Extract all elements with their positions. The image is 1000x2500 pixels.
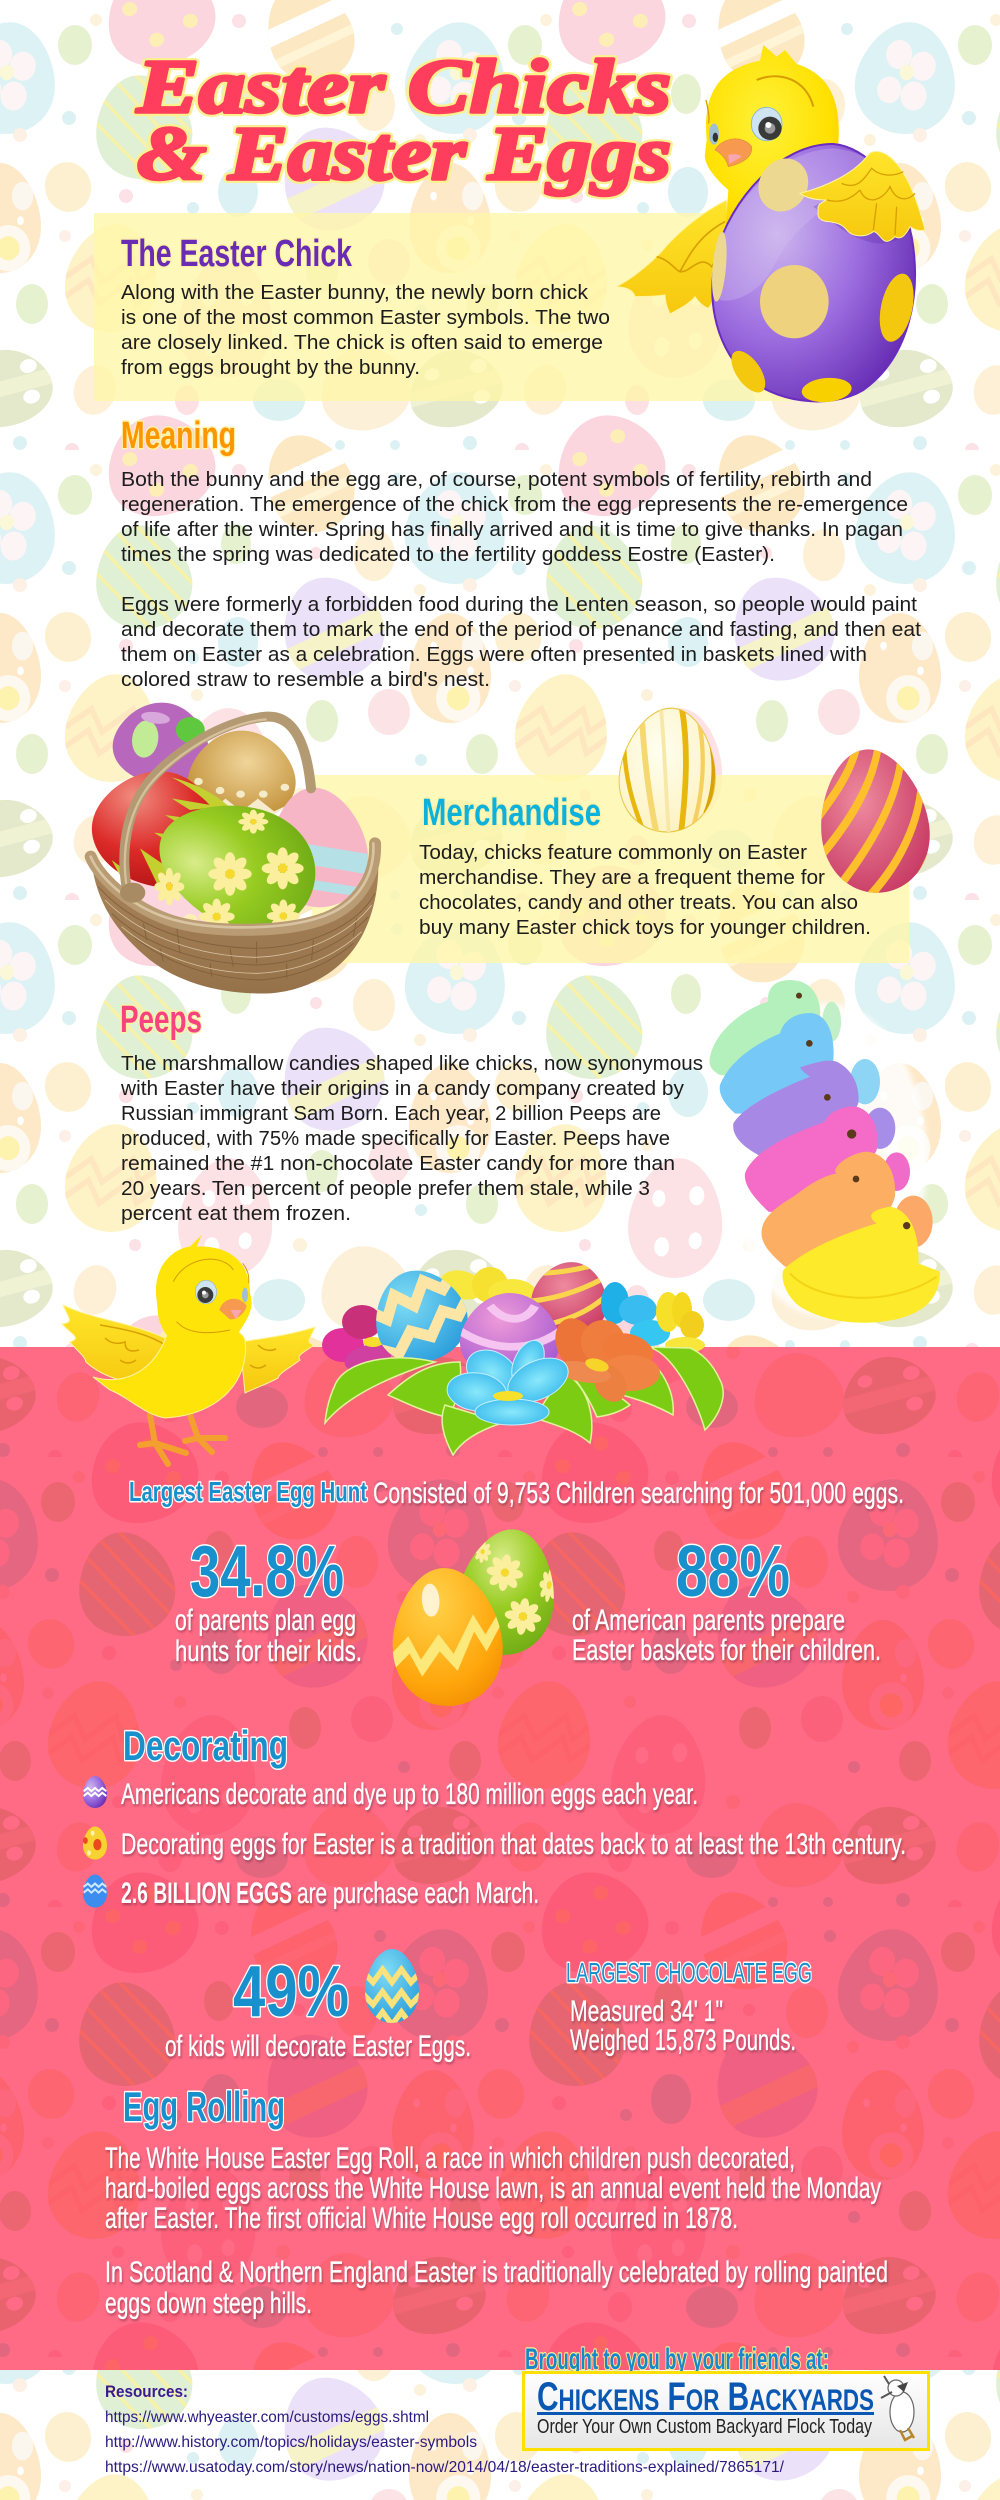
- text: Easter chick description: Along with the Easter bunny, the newly born chick: [121, 281, 589, 304]
- stat: 34.8 percent: of parents plan egg: [175, 1604, 356, 1637]
- stat: 49 percent: of kids will decorate Easter Eggs.: [165, 2030, 471, 2063]
- text: Peeps description: with Easter have their origins in a candy company created by: [120, 1077, 685, 1100]
- text: Merchandise description: merchandise. They are a frequent theme for: [419, 866, 825, 889]
- text: Meaning paragraphs: [121, 468, 921, 691]
- heading: Merchandise: Merchandise: [422, 792, 601, 834]
- text: Meaning paragraphs: Eggs were formerly a forbidden food during the Lenten season, so people would paint: [121, 593, 917, 616]
- text: logo tagline: Order Your Own Custom Backyard Flock Today: [537, 2416, 872, 2438]
- text: Peeps description: remained the #1 non-chocolate Easter candy for more than: [121, 1152, 675, 1175]
- text: logo name: CHICKENS FOR BACKYARDS: [537, 2375, 874, 2419]
- text: Easter chick description: are closely linked. The chick is often said to emerge: [121, 331, 603, 354]
- panel: pink facts background: [0, 1347, 1000, 2370]
- panel: Merchandise: [312, 775, 909, 963]
- heading: Peeps: Peeps: [120, 999, 202, 1041]
- stat: 88 percent: [572, 1532, 881, 1667]
- icon: blue and yellow chevron egg: [365, 1949, 419, 2023]
- panel: Peeps: [120, 999, 703, 1225]
- text: Egg Rolling paragraphs: eggs down steep hills.: [105, 2287, 312, 2320]
- icon: red and yellow striped egg: [821, 749, 930, 893]
- icon: cartoon chicken: [881, 2376, 914, 2440]
- panel: Chickens For Backyards logo: [524, 2372, 928, 2450]
- heading: Decorating: Decorating: [123, 1722, 288, 1769]
- text: fact one: Americans decorate and dye up to 180 million eggs each year.: [121, 1778, 698, 1811]
- panel: largest chocolate egg: LARGEST CHOCOLATE EGG: [566, 1957, 812, 1988]
- text: Peeps description: produced, with 75% made specifically for Easter. Peeps have: [121, 1127, 670, 1150]
- heading: Meaning: Meaning: [121, 415, 236, 457]
- icon: basket of eggs: [79, 696, 379, 993]
- text: resources list: https://www.usatoday.com/story/news/nation-now/2014/04/18/easter-traditions-explained/7865171/: [105, 2459, 785, 2476]
- panel: Decorating: [83, 1722, 906, 1910]
- text: Merchandise description: [419, 841, 871, 939]
- text: Merchandise description: Today, chicks feature commonly on Easter: [419, 841, 807, 864]
- icon: green and orange eggs: [392, 1529, 554, 1706]
- text: fact three: are purchase each March.: [297, 1877, 539, 1910]
- text: Easter chick description: [121, 281, 610, 379]
- panel: Meaning: [121, 415, 921, 691]
- text: Merchandise description: chocolates, candy and other treats. You can also: [419, 891, 858, 914]
- heading: Egg Rolling: Egg Rolling: [123, 2083, 285, 2130]
- text: Meaning paragraphs: times the spring was dedicated to the fertility goddess Eostre (Easter).: [121, 543, 775, 566]
- text: Easter chick description: from eggs brought by the bunny.: [121, 356, 420, 379]
- text: Peeps description: Russian immigrant Sam Born. Each year, 2 billion Peeps are: [121, 1102, 661, 1125]
- text: resources list: https://www.whyeaster.com/customs/eggs.shtml: [105, 2409, 429, 2426]
- panel: Egg Rolling: [105, 2083, 888, 2320]
- stat: 34.8 percent: 34.8%: [190, 1532, 344, 1612]
- icon: gold striped egg: [618, 708, 716, 833]
- text: Meaning paragraphs: them on Easter as a celebration. Eggs were often presented in baskets lined with: [121, 643, 867, 666]
- text: resources list: http://www.history.com/topics/holidays/easter-symbols: [105, 2434, 477, 2451]
- title: & Easter Eggs: [137, 112, 671, 196]
- text: Merchandise description: buy many Easter chick toys for younger children.: [419, 916, 871, 939]
- icon: eggs and flowers bouquet: [322, 1248, 723, 1455]
- icon: purple bullet egg: [83, 1776, 107, 1808]
- stat: 49 percent: [165, 1949, 471, 2063]
- text: Peeps description: The marshmallow candies shaped like chicks, now synonymous: [121, 1052, 703, 1075]
- text: resources list: [105, 2382, 785, 2476]
- stat: 34.8 percent: [175, 1532, 362, 1668]
- title: [136, 45, 671, 196]
- title: Easter Chicks: [136, 45, 671, 129]
- stat: 49 percent: 49%: [233, 1952, 349, 2032]
- text: Meaning paragraphs: Both the bunny and the egg are, of course, potent symbols of fertility, rebirth and: [121, 468, 872, 491]
- icon: stack of marshmallow peeps: [709, 980, 940, 1323]
- text: Peeps description: 20 years. Ten percent of people prefer them stale, while 3: [121, 1177, 650, 1200]
- stat: 88 percent: 88%: [676, 1532, 790, 1612]
- icon: yellow bullet egg: [83, 1826, 107, 1860]
- heading: The Easter Chick: The Easter Chick: [121, 233, 353, 275]
- panel: largest chocolate egg: Measured 34' 1": [570, 1995, 723, 2028]
- text: resources list: Resources:: [105, 2382, 188, 2401]
- text: Peeps description: [120, 1052, 703, 1225]
- stat: 88 percent: Easter baskets for their children.: [572, 1634, 881, 1667]
- text: Meaning paragraphs: of life after the winter. Spring has finally arrived and it is time to give thanks. In pagan: [121, 518, 903, 541]
- text: Peeps description: percent eat them frozen.: [121, 1202, 351, 1225]
- text: Easter chick description: is one of the most common Easter symbols. The two: [121, 306, 610, 329]
- text: largest Easter egg hunt: Largest Easter Egg Hunt: [129, 1476, 367, 1507]
- text: Egg Rolling paragraphs: after Easter. The first official White House egg roll occurred in 1878.: [105, 2202, 738, 2235]
- stat: 34.8 percent: hunts for their kids.: [175, 1635, 362, 1668]
- panel: largest chocolate egg: [566, 1957, 812, 2057]
- icon: blue bullet egg: [83, 1874, 107, 1908]
- text: Meaning paragraphs: colored straw to resemble a bird's nest.: [121, 668, 490, 691]
- icon: chick hugging purple egg: [616, 45, 925, 404]
- stat: 88 percent: of American parents prepare: [572, 1604, 845, 1637]
- icon: chick with open wings: [62, 1235, 315, 1464]
- text: largest Easter egg hunt: [129, 1476, 904, 1510]
- text: fact three: [121, 1877, 539, 1910]
- text: Meaning paragraphs: regeneration. The emergence of the chick from the egg represents the re-emergence: [121, 493, 908, 516]
- title: & Easter Eggs: [137, 112, 671, 196]
- text: Meaning paragraphs: and decorate them to mark the end of the period of penance and fasting, and then eat: [121, 618, 921, 641]
- panel: The Easter Chick: [94, 213, 790, 401]
- text: Egg Rolling paragraphs: [105, 2142, 888, 2320]
- text: brought to you by: Brought to you by your friends at:: [525, 2343, 829, 2376]
- title: Easter Chicks: [136, 45, 671, 129]
- text: fact three: 2.6 BILLION EGGS: [121, 1877, 292, 1910]
- panel: largest chocolate egg: Weighed 15,873 Pounds.: [570, 2024, 796, 2057]
